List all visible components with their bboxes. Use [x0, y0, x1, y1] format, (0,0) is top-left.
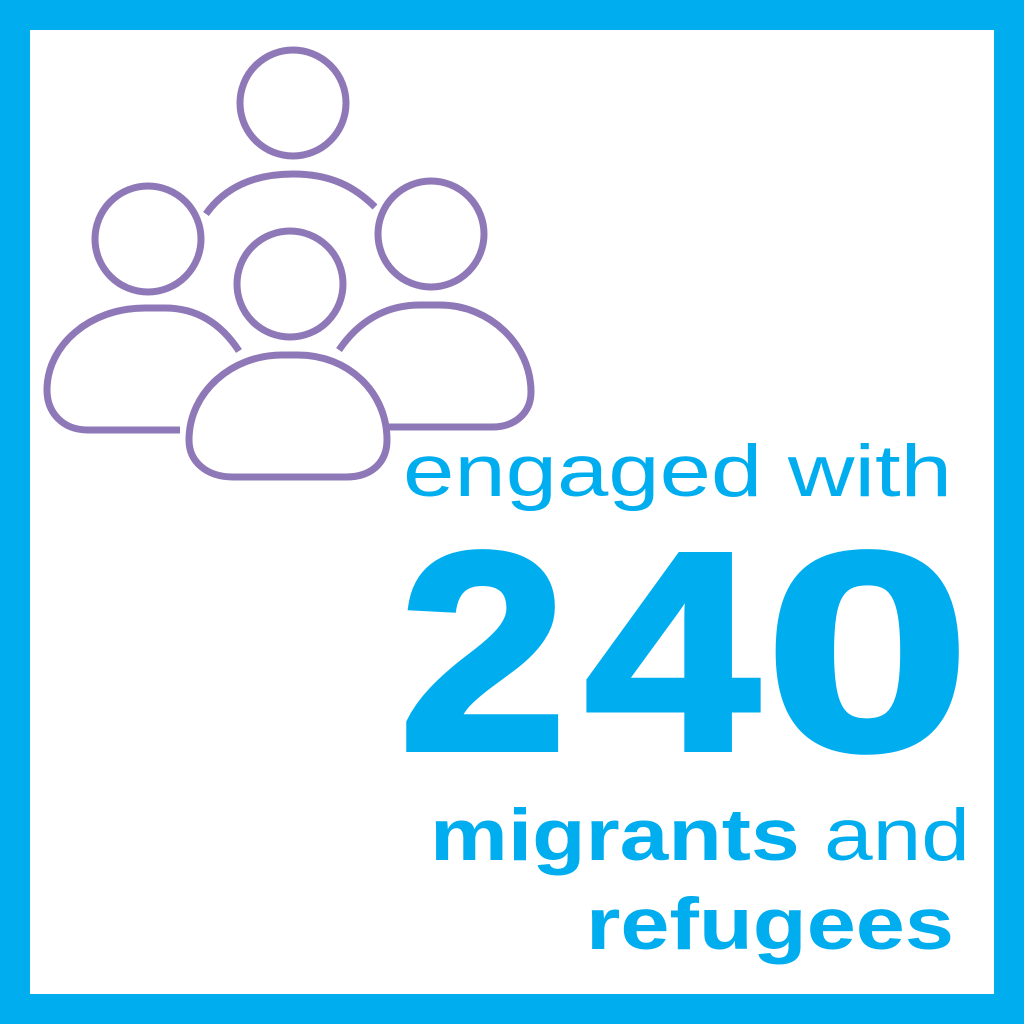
text: engaged with: engaged with [403, 431, 952, 512]
number: 240: 4 [585, 494, 761, 809]
text: refugees: refugees [586, 884, 954, 965]
text: migrants and: migrants and [430, 795, 970, 876]
icon: group of people [47, 50, 531, 477]
number: 240 [399, 494, 970, 809]
number: 240: 2 [399, 494, 567, 809]
number: 240: 0 [765, 494, 970, 809]
